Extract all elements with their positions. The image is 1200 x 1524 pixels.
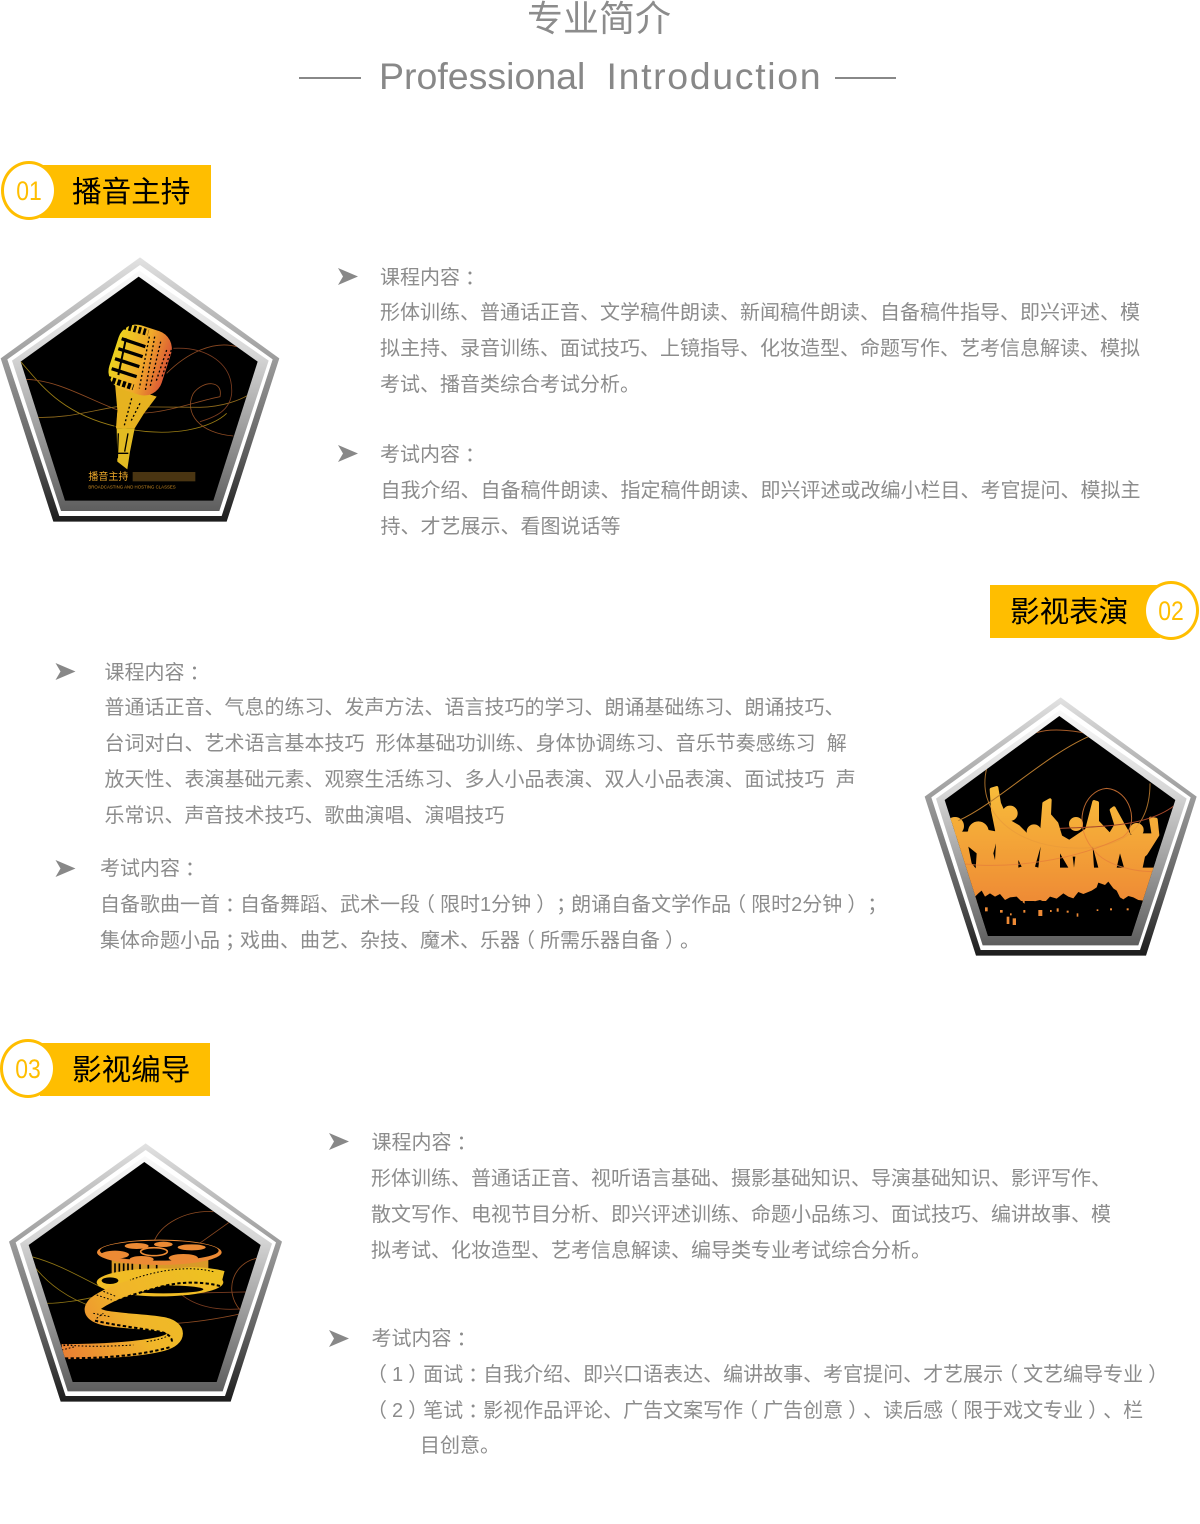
badge: 01 播音主持: 播音主持 (72, 176, 190, 209)
badge: 02 影视表演 (990, 581, 1199, 640)
badge: 01 播音主持 (1, 161, 211, 220)
badge: 01 播音主持: 01 (16, 176, 42, 206)
text block: exam content: 考试内容： (372, 1322, 476, 1351)
icon: pentagon crowd illustration (924, 698, 1197, 956)
text block: course content: 形体训练、普通话正音、文学稿件朗读、新闻稿件朗读、自备稿件指导、即兴评述、模 (380, 302, 1140, 324)
panel: section 01 broadcasting and hosting (0, 161, 1140, 538)
badge: 02 影视表演: 02 (1158, 596, 1184, 626)
text block: course content: 散文写作、电视节目分析、即兴评述训练、命题小品练习、面试技巧、编讲故事、模 (371, 1204, 1111, 1226)
text block: course content: 形体训练、普通话正音、视听语言基础、摄影基础知识、导演基础知识、影评写作、 (371, 1168, 1111, 1190)
arrow (56, 860, 76, 877)
text block: course content: 乐常识、声音技术技巧、歌曲演唱、演唱技巧 (104, 805, 504, 827)
icon: pentagon film reel illustration (9, 1144, 282, 1402)
badge: 03 影视编导 (0, 1039, 210, 1098)
arrow (329, 1330, 349, 1347)
text block: exam content: 考试内容： (100, 852, 205, 881)
text block: exam content (329, 1322, 1168, 1457)
text block: course content (329, 1126, 1111, 1262)
text block: course content: 课程内容： (380, 261, 485, 290)
text block: exam content: 自我介绍、自备稿件朗读、指定稿件朗读、即兴评述或改编小栏目、考官提问、模拟主 (380, 480, 1140, 502)
text block: exam content: 考试内容： (380, 438, 485, 467)
title: English heading with rules: Professional (379, 55, 585, 97)
text block: exam content: 持、才艺展示、看图说话等 (380, 516, 620, 538)
text block: course content: 台词对白、艺术语言基本技巧 形体基础功训练、身体协调练习、音乐节奏感练习 解 (104, 733, 847, 755)
text block: exam content (56, 852, 887, 953)
arrow (56, 663, 76, 680)
text block: course content: 课程内容： (372, 1126, 476, 1155)
icon: pentagon microphone illustration: BROADCASTING AND HOSTING CLASSES (88, 485, 176, 490)
text block: course content: 考试、播音类综合考试分析。 (380, 374, 640, 396)
badge: 02 影视表演: 影视表演 (1010, 596, 1128, 629)
icon: pentagon microphone illustration: 播音主持 (88, 470, 128, 483)
badge: 03 影视编导: 影视编导 (72, 1054, 190, 1087)
text block: course content (338, 261, 1140, 396)
text block: course content: 放天性、表演基础元素、观察生活练习、多人小品表演、双人小品表演、面试技巧 声 (104, 769, 856, 791)
panel: section 03 film and television directing (0, 1039, 1168, 1457)
text block: course content: 课程内容： (104, 656, 210, 685)
text block: course content: 拟考试、化妆造型、艺考信息解读、编导类专业考试综合分析。 (371, 1240, 931, 1262)
text block: exam content: 集体命题小品；戏曲、曲艺、杂技、魔术、乐器（所需乐器自备）。 (100, 924, 700, 953)
icon: pentagon microphone illustration (0, 258, 280, 522)
text block: exam content: 自备歌曲一首：自备舞蹈、武术一段（限时1分钟）；朗诵自备文学作品（限时2分钟）； (100, 888, 887, 917)
badge: 03 影视编导: 03 (15, 1054, 41, 1084)
title: English heading with rules (299, 55, 896, 97)
text block: exam content: （2）笔试：影视作品评论、广告文案写作（广告创意）、读后感（限于戏文专业）、栏 (367, 1394, 1143, 1423)
arrow (329, 1133, 349, 1150)
text block: course content: 拟主持、录音训练、面试技巧、上镜指导、化妆造型、命题写作、艺考信息解读、模拟 (380, 338, 1140, 360)
arrow (338, 268, 358, 285)
text block: exam content (338, 438, 1140, 538)
text block: exam content: 目创意。 (420, 1435, 500, 1457)
text block: course content (56, 656, 856, 827)
panel: section 02 film and television performance (56, 581, 1199, 956)
text block: exam content: （1）面试：自我介绍、即兴口语表达、编讲故事、考官提问、才艺展示（文艺编导专业） (367, 1358, 1168, 1387)
arrow (338, 445, 358, 462)
title: English heading with rules: Introduction (606, 55, 822, 97)
text block: course content: 普通话正音、气息的练习、发声方法、语言技巧的学习、朗诵基础练习、朗诵技巧、 (104, 697, 844, 719)
